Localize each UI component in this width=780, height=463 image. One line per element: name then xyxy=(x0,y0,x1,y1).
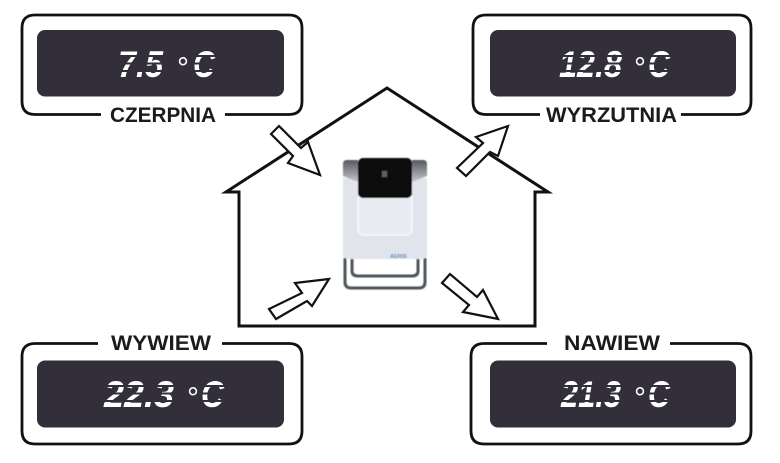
arrow: intake into unit xyxy=(271,126,320,175)
unit shoulders xyxy=(343,160,427,182)
unit body xyxy=(343,178,427,259)
house outline xyxy=(226,88,548,326)
frame xyxy=(471,344,751,444)
unit brand: AERIS xyxy=(390,254,407,260)
panel: czerpnia xyxy=(22,15,302,127)
arrow: exhaust out of house xyxy=(457,126,508,176)
temperature: 7.5 xyxy=(118,44,164,85)
display xyxy=(37,30,284,96)
label: CZERPNIA xyxy=(110,104,216,127)
frame xyxy=(22,15,302,114)
temperature xyxy=(557,44,672,85)
temperature: C xyxy=(201,374,225,415)
temperature xyxy=(116,44,217,85)
unit display cover xyxy=(358,158,412,198)
temperature: ° xyxy=(634,52,646,85)
display xyxy=(490,360,736,428)
panel: wywiew xyxy=(22,332,302,444)
temperature: ° xyxy=(177,52,189,85)
temperature: ° xyxy=(187,382,199,415)
temperature: 21.3 xyxy=(560,374,621,415)
temperature: 22.3 xyxy=(103,374,174,415)
temperature: 12.8 xyxy=(559,44,622,85)
panel: wyrzutnia xyxy=(473,15,751,127)
unit screen glyph xyxy=(382,171,387,177)
label: WYWIEW xyxy=(111,332,211,355)
unit front panel xyxy=(358,197,412,235)
unit legs xyxy=(345,258,425,288)
temperature: C xyxy=(648,44,671,85)
frame xyxy=(473,15,751,114)
display xyxy=(490,30,736,96)
label: WYRZUTNIA xyxy=(546,104,677,127)
label: NAWIEW xyxy=(564,332,660,355)
temperature: C xyxy=(648,374,671,415)
temperature: C xyxy=(193,44,216,85)
arrow: extract into unit xyxy=(269,279,329,319)
ventilation unit xyxy=(343,158,427,288)
temperature xyxy=(559,374,672,415)
frame xyxy=(22,344,302,444)
arrow: supply out of unit xyxy=(442,274,498,319)
temperature xyxy=(102,374,226,415)
panel: nawiew xyxy=(471,332,751,444)
temperature: ° xyxy=(634,382,646,415)
display xyxy=(37,360,284,428)
